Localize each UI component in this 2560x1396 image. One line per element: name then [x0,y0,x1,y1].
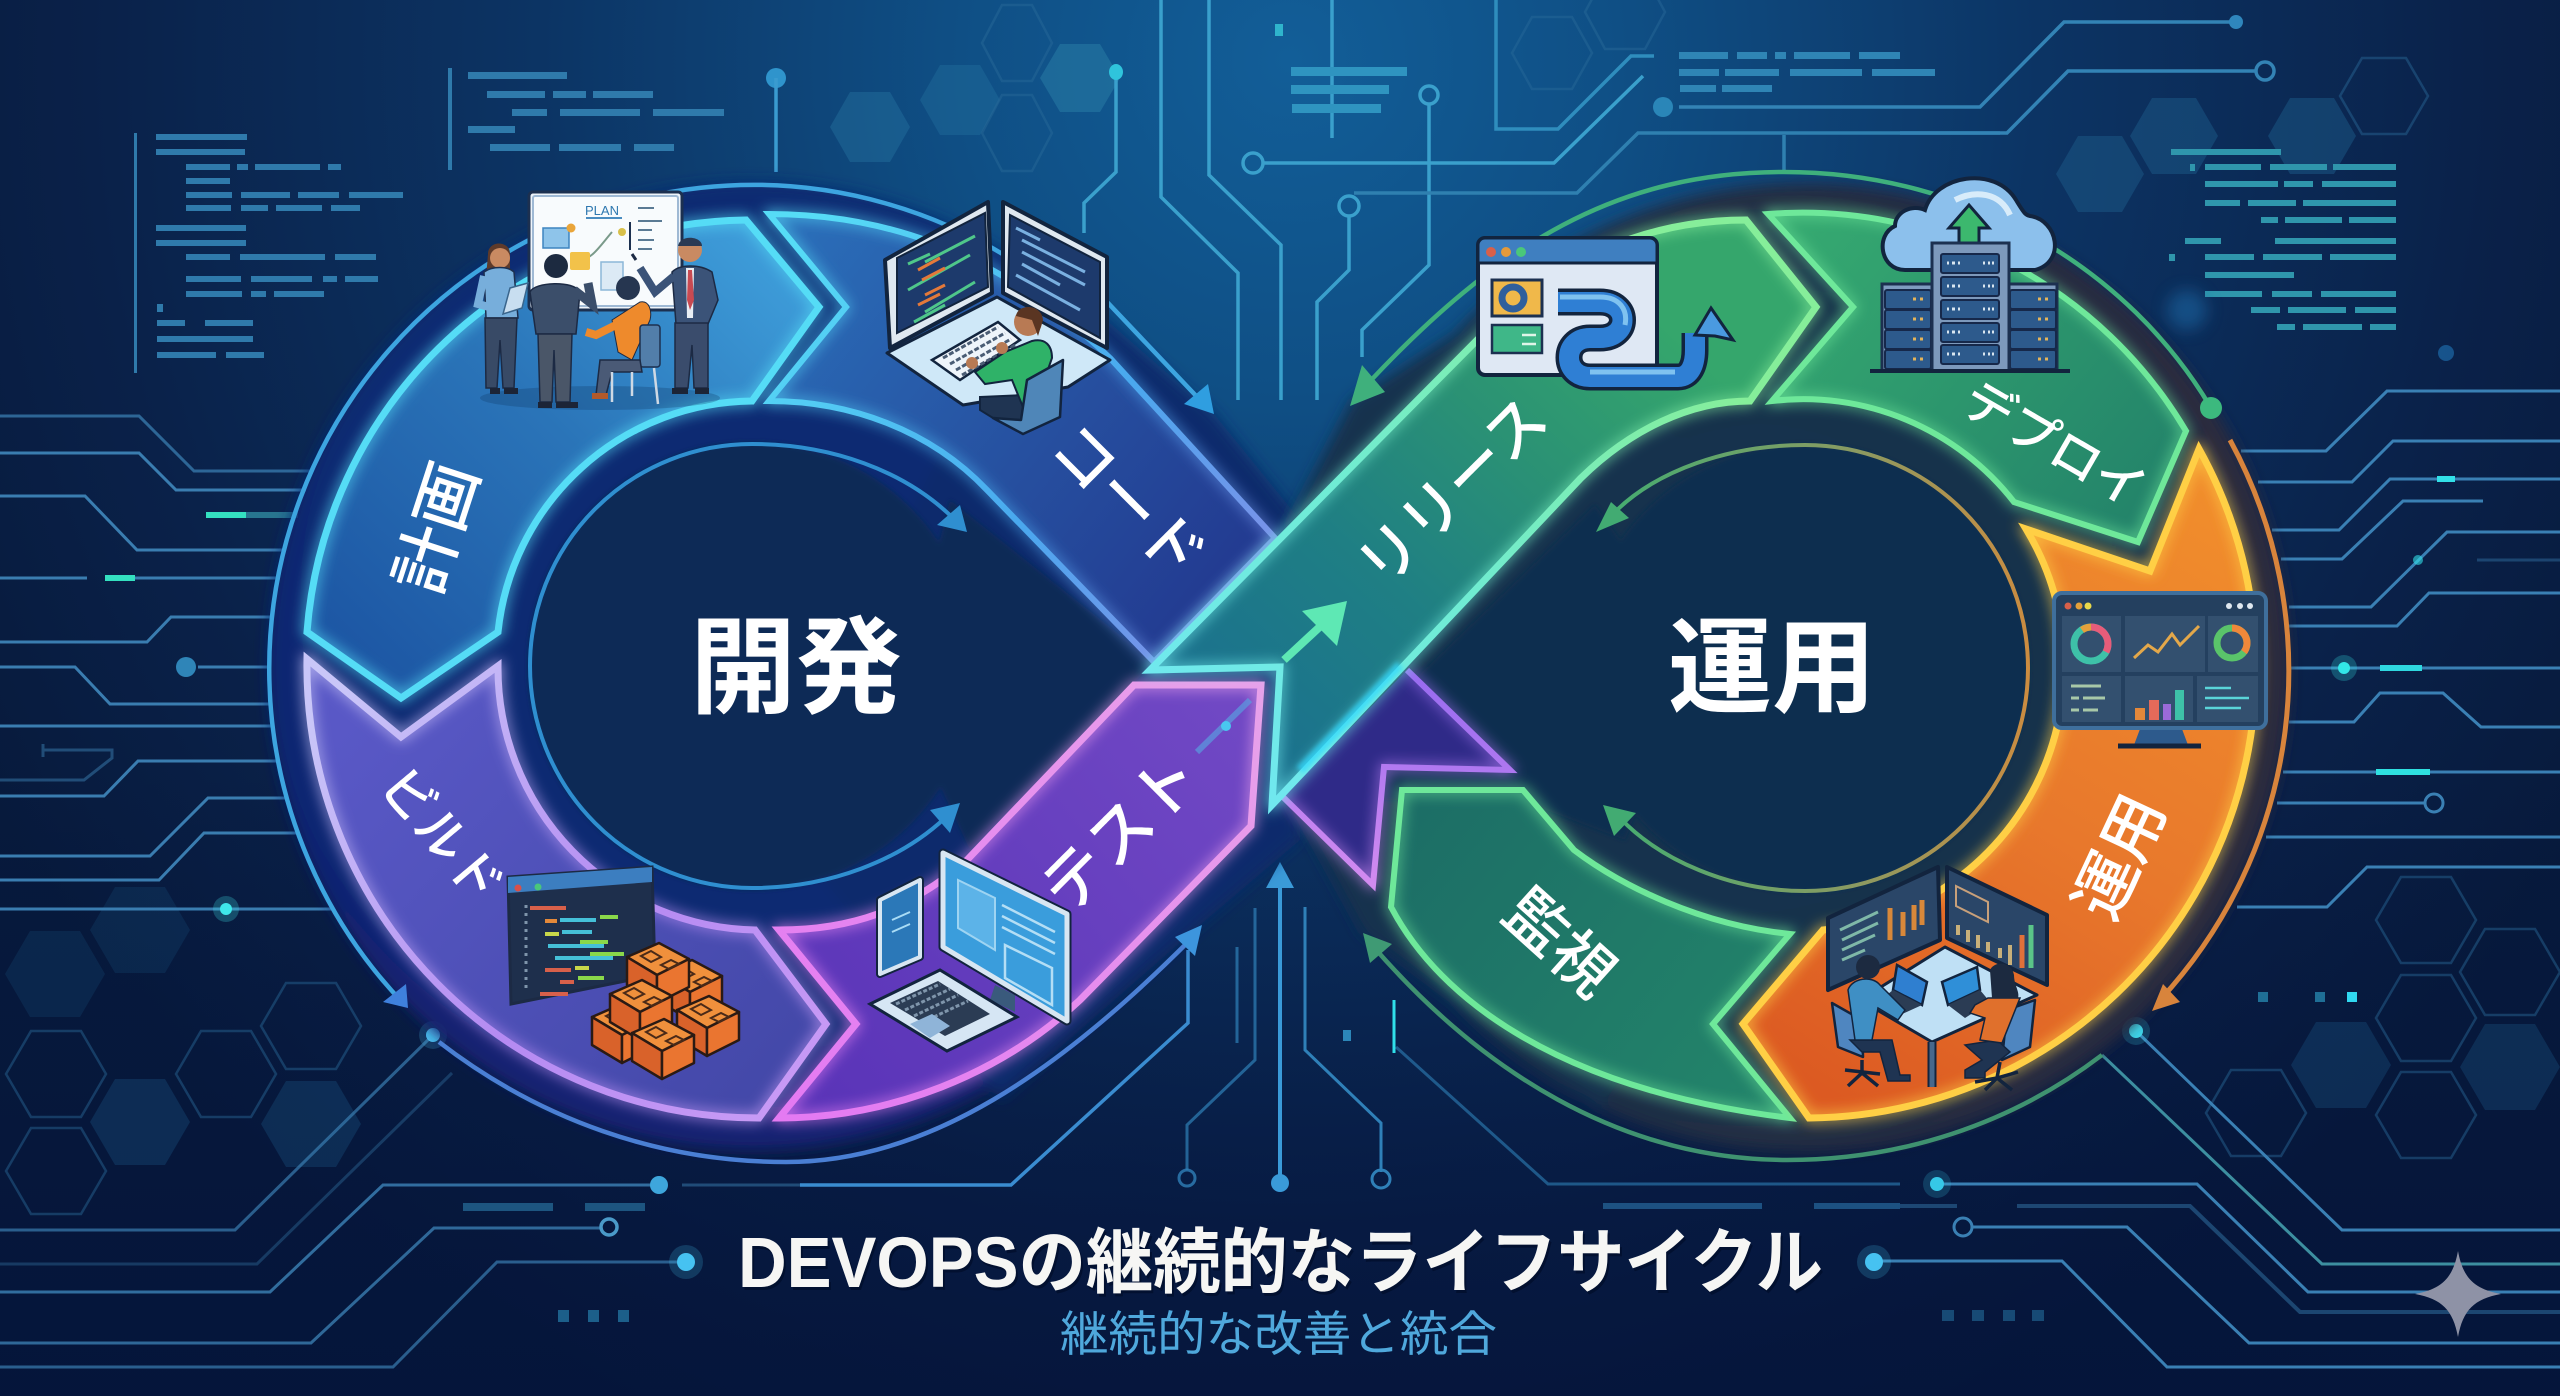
circuit glow nodes left [105,68,786,1322]
circuit lines left [0,416,800,1367]
title: DEVOPSの継続的なライフサイクル [740,1227,1825,1306]
outer arrow ring: left top [269,185,1214,1008]
label: release: リリース [1346,385,1560,599]
label: monitor: 監視 [1490,877,1628,1011]
arrow: release green [1284,601,1347,660]
dark loop backing: right [1290,184,2289,1152]
circuit lines top centre [1084,0,2274,400]
segment: release band [1150,220,1816,805]
person: seated in orange [586,276,660,404]
heading: development: 開発 [690,610,902,728]
circuit glow nodes right [1857,476,2455,1321]
dark loop backing: left [268,182,1300,1150]
inner area right [1290,444,2029,892]
person: presenter in suit [632,238,718,394]
code lines top-right [2167,149,2454,361]
icon: release pipeline window [1478,238,1733,377]
label: operate: 運用 [2060,784,2180,930]
icon: planning team at whiteboard [478,192,720,410]
label: plan: 計画 [381,454,493,602]
label: deploy: デプロイ [1953,371,2155,519]
label: code: コード [1037,412,1217,592]
segment: plan band [307,220,819,698]
heading: operations: 運用 [1668,611,1876,727]
inner arrow ring: left [530,444,967,888]
outer arrow ring: left bottom [439,925,1202,1162]
segment: operate band [1743,449,2256,1118]
label: test: テスト [1028,740,1214,926]
segment: build band [307,659,826,1118]
icon: monitoring dashboard [2054,593,2266,746]
circuit lines bottom centre [800,888,1900,1206]
circuit lines right [1874,391,2560,1367]
code bars top centre [1109,15,2243,117]
outer arrow arc: right green [1350,172,2222,419]
whiteboard [529,192,682,310]
person: man with back turned [530,254,592,408]
segment: test band [779,685,1261,1118]
segment: centre cross [1283,670,1510,885]
code lines top-left [134,68,724,373]
title: DEVOPSの継続的なライフサイクル [738,1224,1823,1303]
subtitle: 継続的な改善と統合 [1060,1308,1497,1362]
icon: operations team at desk [1828,867,2047,1090]
segment: deploy band [1768,213,2186,542]
icon: test devices [870,853,1067,1051]
segment: code band [769,214,1275,662]
icon: developer at dual monitors [885,202,1110,434]
label: build: ビルド [369,758,513,914]
icon: code window and bricks [508,867,739,1079]
inner area left [528,442,1154,890]
arrow: centre up [1266,862,1294,888]
person: woman [478,244,528,394]
segment: monitoring band [1391,790,1790,1118]
icon: cloud and servers [1870,178,2070,371]
outer arrow arc: right bottom green [1363,933,2102,1160]
whiteboard: PLAN [585,203,619,218]
outer arrow arc: right orange [2152,440,2289,1011]
icon: sparkle watermark [2415,1251,2501,1337]
inner arrow ring: right [1596,445,2028,891]
